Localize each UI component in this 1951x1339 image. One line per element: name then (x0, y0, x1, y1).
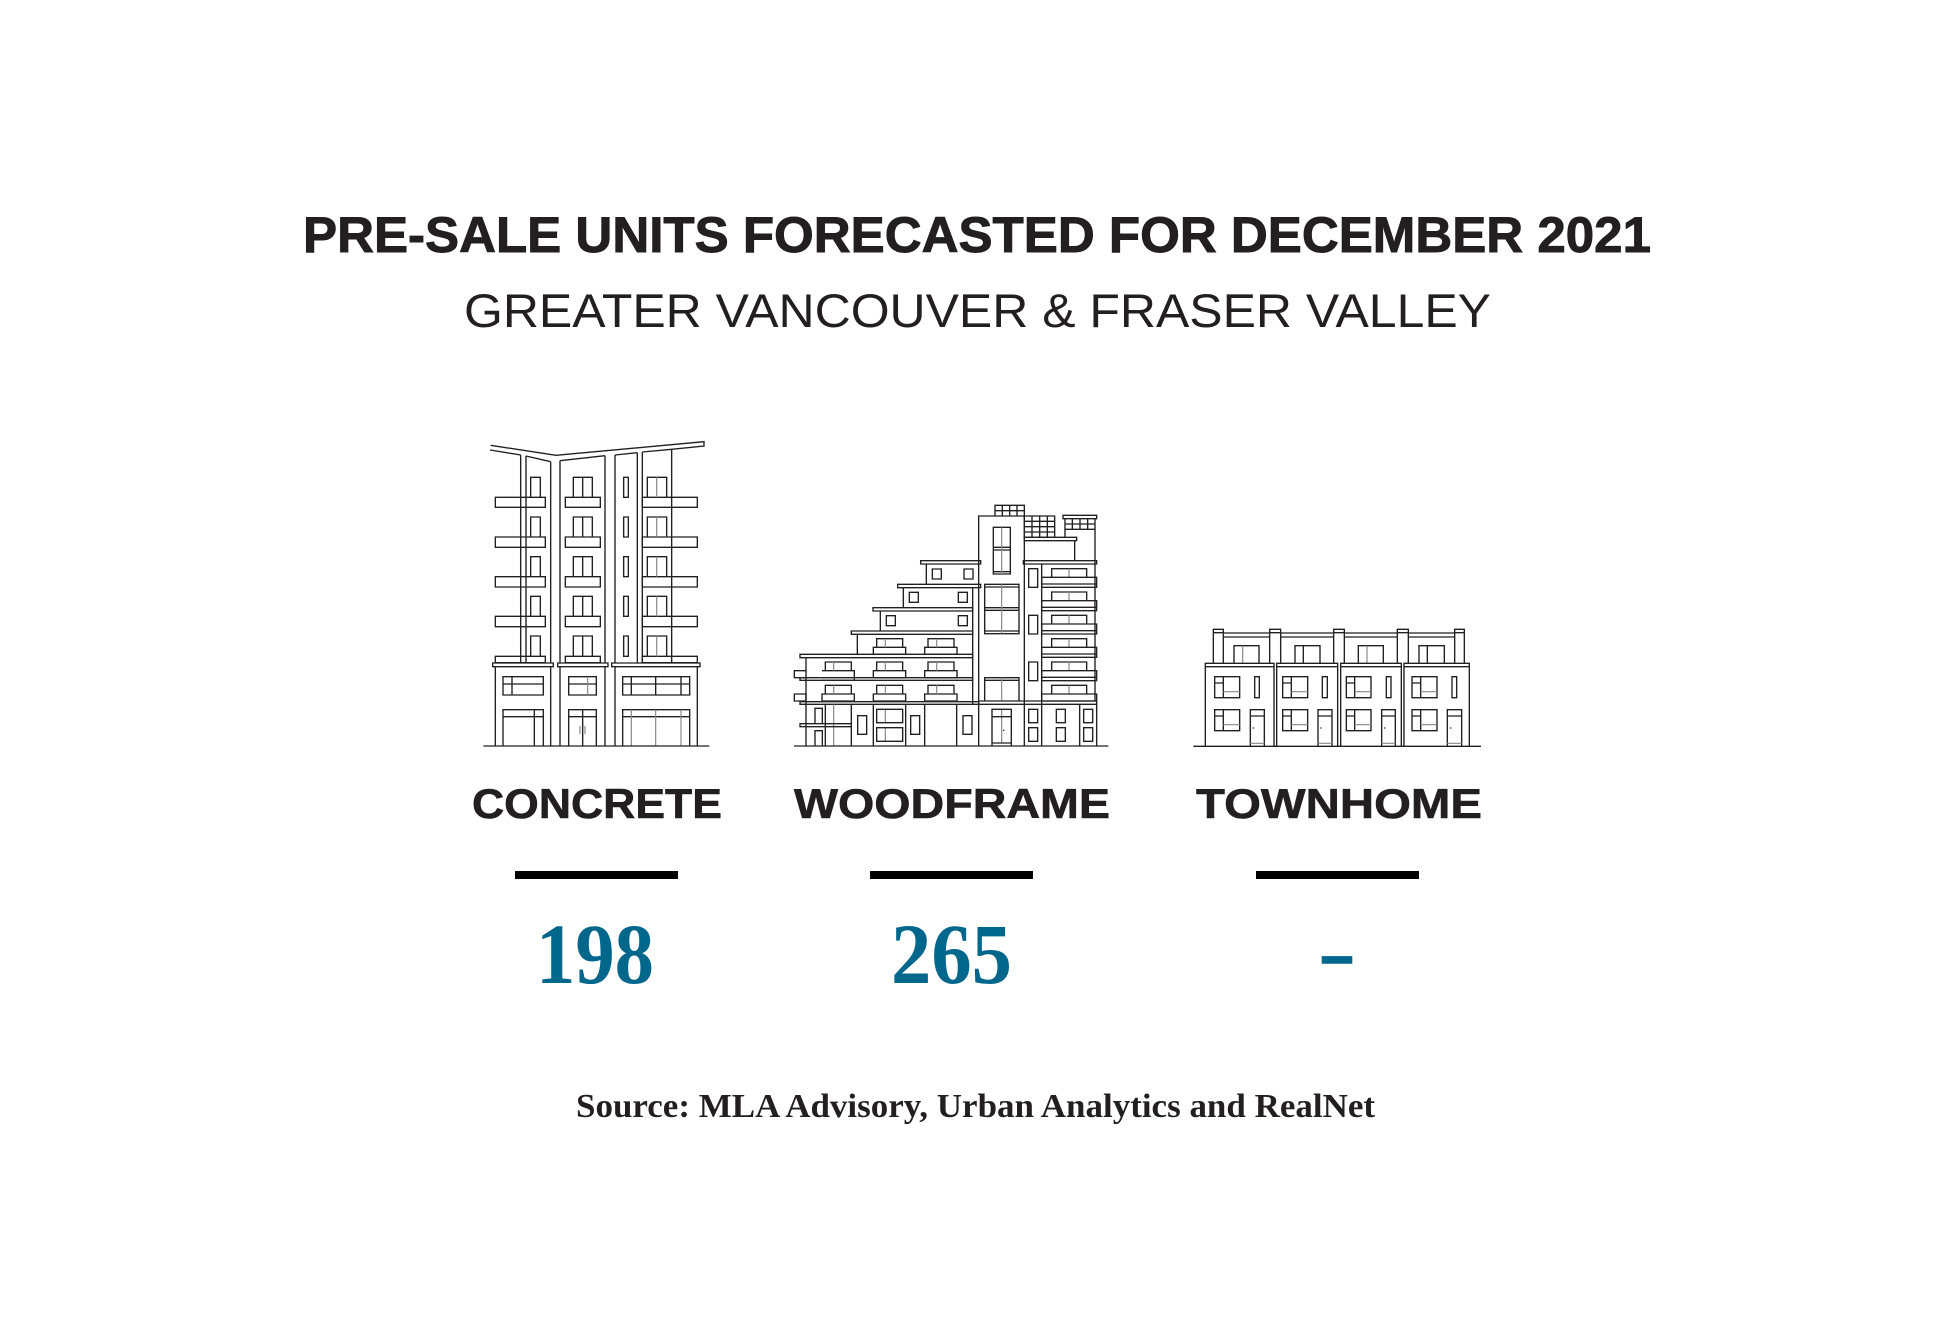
right balconies (1052, 569, 1087, 694)
icon: townhome building (1193, 629, 1481, 746)
panel: townhome (1193, 629, 1482, 987)
icon: woodframe building (794, 505, 1108, 746)
unit 4 (1412, 677, 1462, 746)
value: concrete: 198 (536, 906, 654, 1002)
divider bar (515, 871, 678, 879)
roof grids (995, 505, 1024, 516)
roof (490, 442, 704, 462)
subtitle: GREATER VANCOUVER & FRASER VALLEY (464, 284, 1491, 337)
cornice and walls (1205, 663, 1469, 667)
divider bar (870, 871, 1033, 879)
source note: Source: MLA Advisory, Urban Analytics and RealNet (576, 1088, 1376, 1125)
panel: woodframe (794, 505, 1110, 1002)
tower (979, 516, 1042, 746)
unit 1 (1215, 677, 1264, 746)
icon: concrete building (483, 442, 709, 746)
title: PRE-SALE UNITS FORECASTED FOR DECEMBER 2021 (303, 207, 1651, 263)
stepped terraces (921, 561, 981, 584)
balconies (495, 497, 545, 663)
upper windows (531, 477, 540, 656)
cornice (493, 663, 700, 667)
columns (521, 449, 672, 663)
label: concrete: CONCRETE (472, 780, 722, 827)
rooftop (1223, 633, 1455, 637)
value: townhome: - (1320, 921, 1354, 987)
unit 3 (1346, 677, 1395, 746)
unit 2 (1283, 677, 1332, 746)
value: woodframe: 265 (891, 906, 1012, 1002)
ground floor (825, 704, 1097, 746)
panel: concrete (472, 442, 722, 1002)
divider bar (1256, 871, 1419, 879)
ground floor (495, 667, 697, 746)
label: townhome: TOWNHOME (1196, 780, 1482, 827)
label: woodframe: WOODFRAME (794, 780, 1110, 827)
door (992, 709, 1011, 746)
